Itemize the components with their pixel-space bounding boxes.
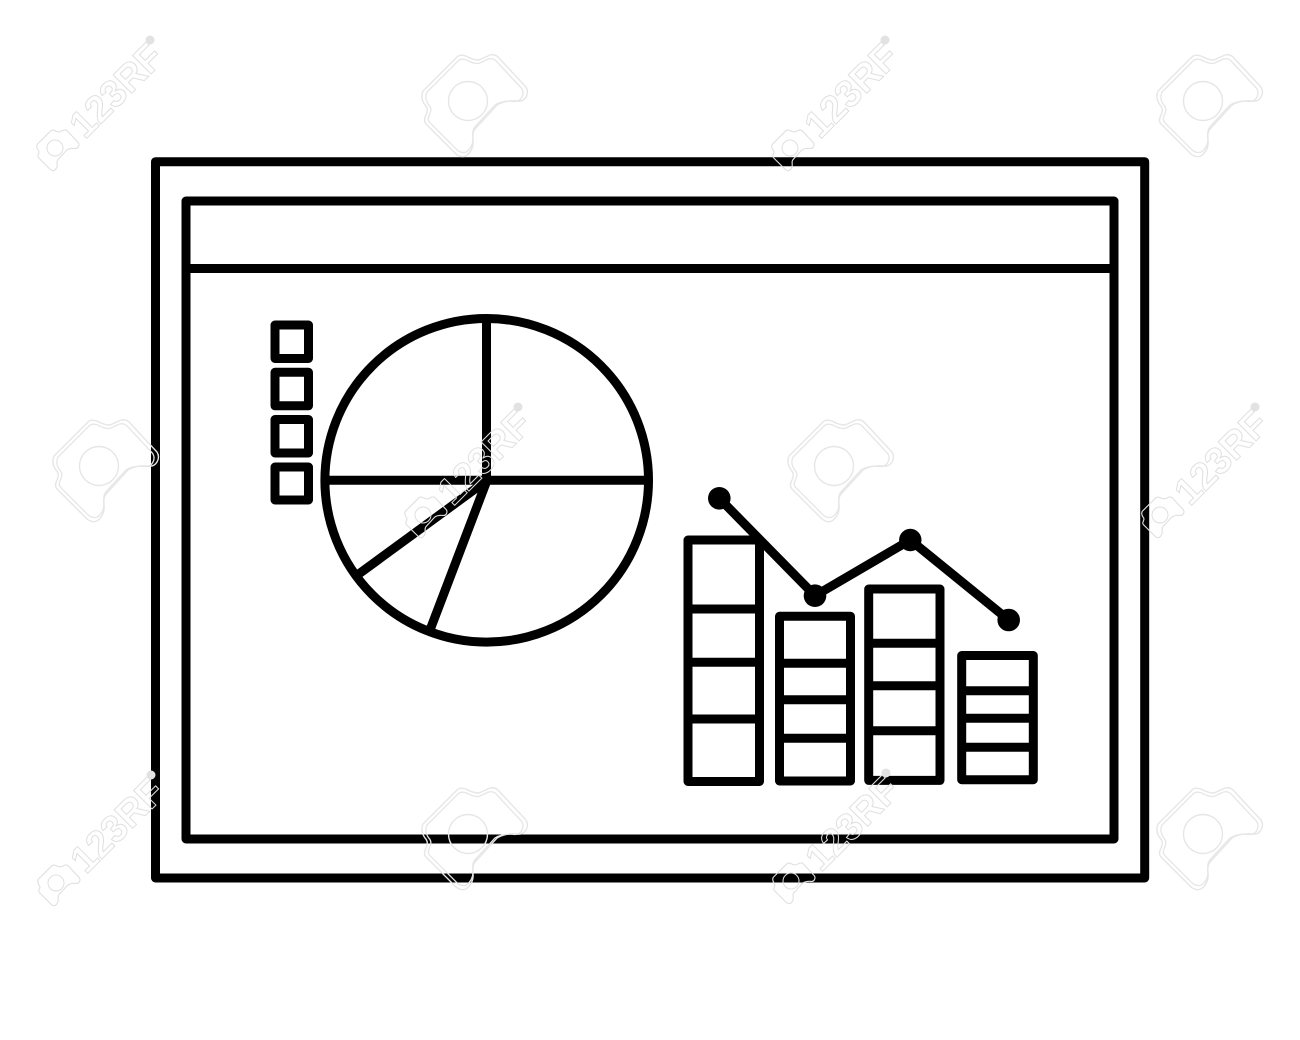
watermark: small 123RF logos: 123RF bbox=[63, 771, 173, 881]
browser window bbox=[186, 201, 1114, 839]
dashboard illustration bbox=[156, 162, 1145, 878]
watermark: small 123RF logos: 123RF bbox=[1167, 403, 1277, 513]
bar 3 bbox=[869, 589, 940, 780]
pie chart bbox=[325, 318, 650, 642]
bar 2 bbox=[780, 616, 850, 781]
legend squares bbox=[275, 325, 308, 500]
watermark: large camera logos bbox=[53, 55, 1262, 890]
watermark: small 123RF logos: 123RF bbox=[430, 403, 540, 513]
bar 1 bbox=[688, 540, 760, 782]
outer frame bbox=[156, 162, 1145, 878]
watermark: small 123RF logos: 123RF bbox=[797, 36, 907, 146]
watermark: small 123RF logos bbox=[37, 36, 1277, 906]
trend line with points bbox=[708, 487, 1020, 631]
watermark: small 123RF logos: 123RF bbox=[798, 769, 908, 879]
watermark: small 123RF logos: 123RF bbox=[62, 36, 172, 146]
bar 4 bbox=[962, 656, 1033, 780]
bar chart bbox=[688, 540, 1033, 782]
